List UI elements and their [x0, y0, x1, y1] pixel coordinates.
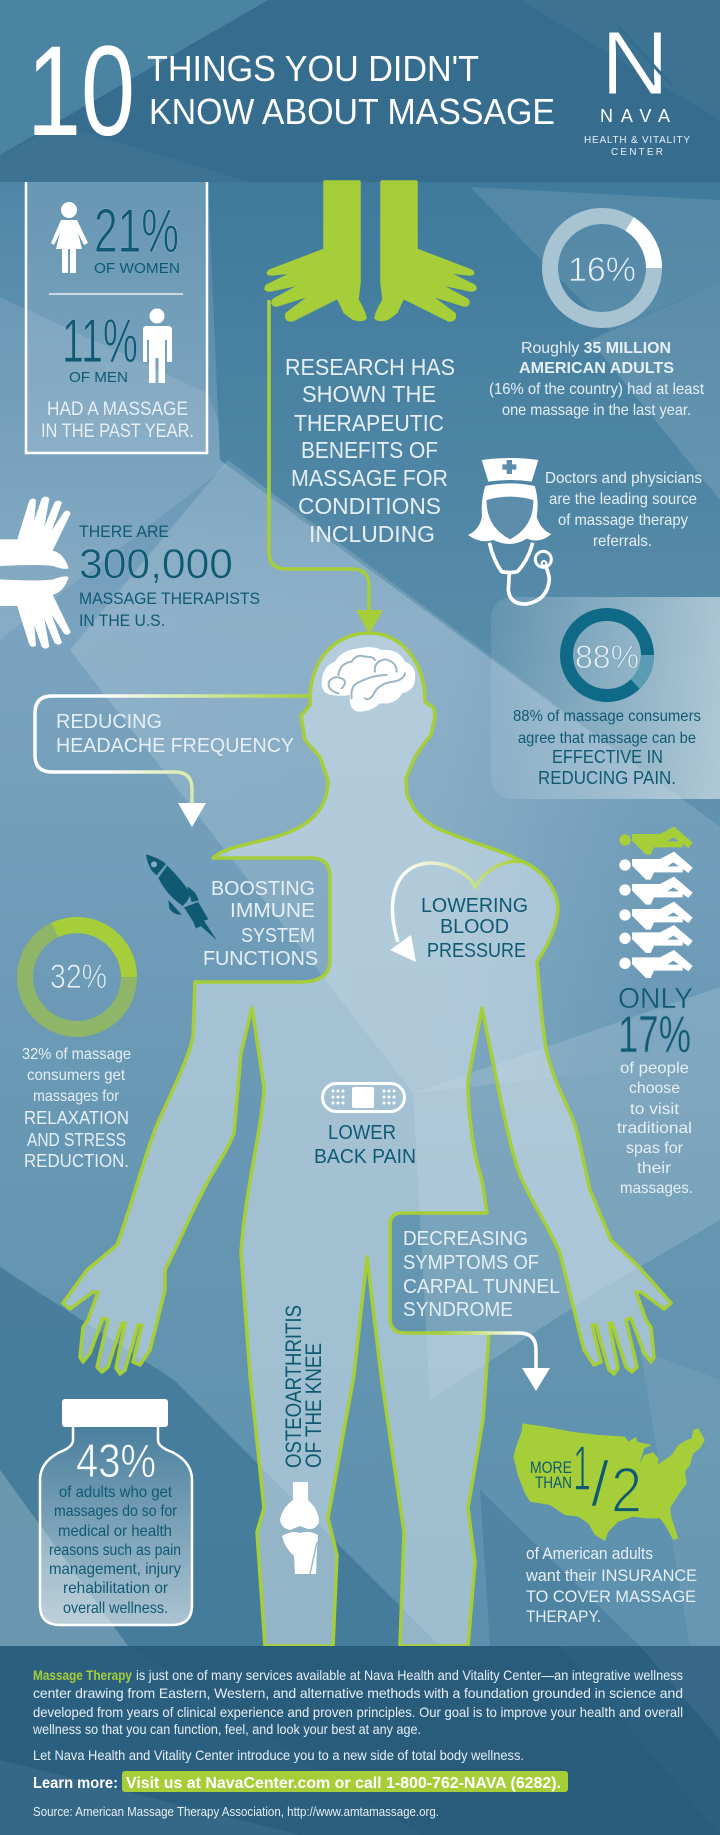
- footer: paragraph: wellness so that you can function, feel, and look your best at any age.: [32, 1721, 421, 1737]
- text: doctors and physicians: referrals.: [593, 533, 652, 550]
- text: insurance to cover massage: want their INSURANCE: [525, 1566, 697, 1585]
- text: research has shown: SHOWN THE: [302, 381, 436, 407]
- chart: 88 percent donut: 88%: [575, 639, 639, 675]
- text: insurance to cover massage: TO COVER MASSAGE: [526, 1587, 696, 1606]
- chart: 32 percent donut: 32%: [50, 958, 107, 996]
- stat: more than one half: [530, 1432, 642, 1526]
- logo mark: N: [601, 14, 669, 114]
- icon: woman: [51, 202, 88, 273]
- text: only 17 percent: to visit: [630, 1101, 680, 1118]
- icon: man: [143, 308, 172, 383]
- icon: massage figures: [619, 827, 693, 978]
- text: carpal tunnel: SYMPTOMS OF: [403, 1252, 539, 1274]
- chart: 88 percent donut: [566, 614, 648, 696]
- stat: more than one half: 2: [611, 1454, 642, 1526]
- title: [27, 20, 555, 163]
- text: adults who get massages: reasons such as pain: [49, 1542, 181, 1559]
- bottle body: [40, 1427, 192, 1625]
- text: doctors and physicians: Doctors and physicians: [545, 470, 702, 487]
- logo tagline second line: CENTER: [611, 147, 663, 158]
- chart: 32 percent donut: [25, 925, 129, 1029]
- text: osteoarthritis of the knee: OSTEOARTHRITIS: [281, 1305, 306, 1468]
- arrow: carpal line: [440, 1333, 550, 1391]
- arrow: research line to head: [269, 300, 383, 634]
- text: osteoarthritis of the knee: [281, 1305, 326, 1468]
- text: boosting immune system: BOOSTING: [211, 878, 315, 900]
- footer: paragraph: Massage Therapy: [33, 1667, 132, 1683]
- icon: knee joint: [280, 1482, 319, 1574]
- text: effective in reducing pain: agree that massage can be: [518, 730, 696, 747]
- background: [0, 182, 720, 1646]
- text: 300,000 therapists: [79, 522, 260, 630]
- footer: source: Source: American Massage Therapy Association, http://www.amtamassage.org.: [33, 1804, 439, 1819]
- icon: white hands: [0, 497, 71, 649]
- text: research has shown: MASSAGE FOR: [291, 465, 448, 491]
- text: 35 million adults: AMERICAN ADULTS: [519, 360, 674, 377]
- text: 300,000 therapists: 300,000: [79, 540, 233, 587]
- text: had a massage: IN THE PAST YEAR.: [41, 421, 194, 442]
- text: adults who get massages: [49, 1484, 181, 1617]
- footer: paragraph: is just one of many services available at Nava Health and Vitality Center—an integrative wellness: [136, 1667, 683, 1683]
- stat: more than one half: THAN: [535, 1473, 572, 1492]
- label: of women: OF WOMEN: [94, 260, 180, 277]
- text: relaxation and stress: RELAXATION: [24, 1108, 129, 1128]
- header band: [0, 0, 720, 182]
- text: only 17 percent: choose: [629, 1080, 680, 1097]
- text: doctors and physicians: of massage therapy: [558, 512, 688, 529]
- text: 35 million adults: one massage in the last year.: [502, 402, 691, 419]
- text: 35 million adults: [489, 340, 705, 419]
- footer: paragraph: [32, 1667, 683, 1737]
- icon: brain: [322, 647, 415, 712]
- panel: bottle 43 percent: [40, 1399, 192, 1625]
- text: lowering blood pressure: [421, 895, 528, 962]
- stat: 43 percent: 43%: [76, 1434, 156, 1487]
- text: insurance to cover massage: of American adults: [526, 1544, 653, 1563]
- text: adults who get massages: massages do so for: [54, 1503, 178, 1520]
- text: only 17 percent: their: [637, 1160, 672, 1177]
- text: adults who get massages: overall wellness.: [63, 1600, 168, 1617]
- text: only 17 percent: traditional: [617, 1120, 692, 1137]
- text: boosting immune system: [203, 878, 318, 970]
- icon: green hands: [266, 182, 475, 320]
- text: doctors and physicians: [545, 470, 702, 550]
- text: adults who get massages: rehabilitation or: [63, 1580, 169, 1597]
- text: research has shown: BENEFITS OF: [301, 437, 438, 463]
- text: only 17 percent: [617, 983, 693, 1197]
- text: boosting immune system: FUNCTIONS: [203, 948, 318, 970]
- panel: women and men stats: [26, 182, 207, 453]
- text: insurance to cover massage: [525, 1544, 697, 1626]
- text: only 17 percent: 17%: [618, 1006, 691, 1064]
- text: carpal tunnel: SYNDROME: [403, 1299, 513, 1321]
- text: lowering blood pressure: PRESSURE: [427, 940, 526, 962]
- footer: call to action: Visit us at NavaCenter.com or call 1-800-762-NAVA (6282).: [126, 1775, 561, 1792]
- text: adults who get massages: of adults who get: [59, 1484, 173, 1501]
- text: relaxation and stress: massages for: [33, 1088, 120, 1105]
- text: adults who get massages: management, injury: [49, 1561, 181, 1578]
- icon: rocket: [146, 854, 217, 940]
- text: effective in reducing pain: 88% of massage consumers: [513, 708, 701, 725]
- stat: 11 percent: 11%: [62, 307, 138, 376]
- text: insurance to cover massage: THERAPY.: [526, 1607, 601, 1626]
- text: carpal tunnel: CARPAL TUNNEL: [403, 1276, 560, 1298]
- text: boosting immune system: IMMUNE: [230, 900, 315, 922]
- text: relaxation and stress: AND STRESS: [27, 1130, 126, 1150]
- stat: more than one half: /: [591, 1448, 609, 1520]
- text: lower back pain: BACK PAIN: [314, 1146, 416, 1168]
- stat: more than one half: 1: [573, 1432, 591, 1504]
- bottle cap: [62, 1399, 168, 1427]
- text: had a massage: [41, 399, 194, 442]
- text: research has shown: [285, 354, 455, 547]
- text: lowering blood pressure: BLOOD: [440, 916, 509, 938]
- text: effective in reducing pain: [513, 708, 701, 788]
- figures: white group: [619, 852, 693, 978]
- text: boosting immune system: SYSTEM: [241, 925, 315, 947]
- logo name: NAVA: [600, 106, 670, 126]
- icon: bandage: [322, 1084, 404, 1112]
- icon: nurse with stethoscope: [468, 458, 551, 604]
- text: only 17 percent: spas for: [626, 1140, 684, 1157]
- text: 35 million adults: (16% of the country) had at least: [489, 381, 705, 398]
- text: only 17 percent: of people: [620, 1060, 689, 1077]
- text: research has shown: INCLUDING: [309, 521, 435, 547]
- text: relaxation and stress: [22, 1046, 131, 1171]
- stat: 21 percent: 21%: [94, 197, 179, 266]
- text: 300,000 therapists: IN THE U.S.: [79, 611, 165, 630]
- text: reducing headache frequency: HEADACHE FREQUENCY: [56, 735, 294, 757]
- text: 300,000 therapists: MASSAGE THERAPISTS: [79, 589, 260, 608]
- chart: 16 percent donut: [550, 216, 654, 320]
- text: reducing headache frequency: [56, 711, 294, 757]
- text: relaxation and stress: 32% of massage: [22, 1046, 131, 1063]
- title: big number: 10: [27, 20, 135, 163]
- text: lowering blood pressure: LOWERING: [421, 895, 528, 917]
- text: carpal tunnel: DECREASING: [403, 1228, 528, 1250]
- text: relaxation and stress: consumers get: [27, 1067, 126, 1084]
- text: 300,000 therapists: THERE ARE: [79, 522, 169, 541]
- text: reducing headache frequency: REDUCING: [56, 711, 162, 733]
- text: effective in reducing pain: REDUCING PAIN.: [538, 768, 676, 788]
- icon: usa map: [513, 1423, 705, 1541]
- arrow: headache line: [35, 696, 310, 827]
- text: lower back pain: [314, 1122, 416, 1168]
- figure: highlighted green: [619, 827, 693, 855]
- logo: [584, 14, 690, 158]
- text: osteoarthritis of the knee: OF THE KNEE: [301, 1343, 326, 1468]
- panel: 88 percent: [491, 597, 720, 799]
- human body outline: [63, 633, 671, 1646]
- text: effective in reducing pain: EFFECTIVE IN: [552, 747, 663, 767]
- text: had a massage: HAD A MASSAGE: [47, 399, 188, 420]
- text: only 17 percent: massages.: [620, 1180, 693, 1197]
- text: research has shown: RESEARCH HAS: [285, 354, 455, 380]
- text: adults who get massages: medical or health: [58, 1523, 172, 1540]
- text: only 17 percent: ONLY: [618, 983, 693, 1015]
- footer: paragraph: developed from years of clinical experience and proven principles. Our goal is to improve your health and overall: [33, 1704, 683, 1720]
- text: 35 million adults: Roughly 35 MILLION: [521, 340, 671, 357]
- text: doctors and physicians: are the leading source: [549, 491, 697, 508]
- text: relaxation and stress: REDUCTION.: [24, 1151, 129, 1171]
- text: research has shown: THERAPEUTIC: [294, 410, 444, 436]
- title: line one: THINGS YOU DIDN'T: [147, 48, 479, 89]
- label: of men: OF MEN: [69, 369, 128, 386]
- text: lower back pain: LOWER: [328, 1122, 396, 1144]
- icon: heart arrow: [390, 861, 525, 962]
- footer panel: [0, 1646, 720, 1835]
- donut label: 16 percent: 16%: [568, 251, 636, 289]
- footer: paragraph: center drawing from Eastern, Western, and alternative methods with a foundation grounded in science and: [33, 1685, 683, 1701]
- logo tagline: HEALTH & VITALITY: [584, 135, 690, 146]
- footer: learn more: Learn more:: [33, 1775, 118, 1792]
- title: line two: KNOW ABOUT MASSAGE: [149, 91, 555, 132]
- footer: introduce line: Let Nava Health and Vitality Center introduce you to a new side of total body wellness.: [33, 1747, 524, 1763]
- text: research has shown: CONDITIONS: [298, 493, 441, 519]
- stat: more than one half: MORE: [530, 1458, 572, 1477]
- text: carpal tunnel: [403, 1228, 560, 1321]
